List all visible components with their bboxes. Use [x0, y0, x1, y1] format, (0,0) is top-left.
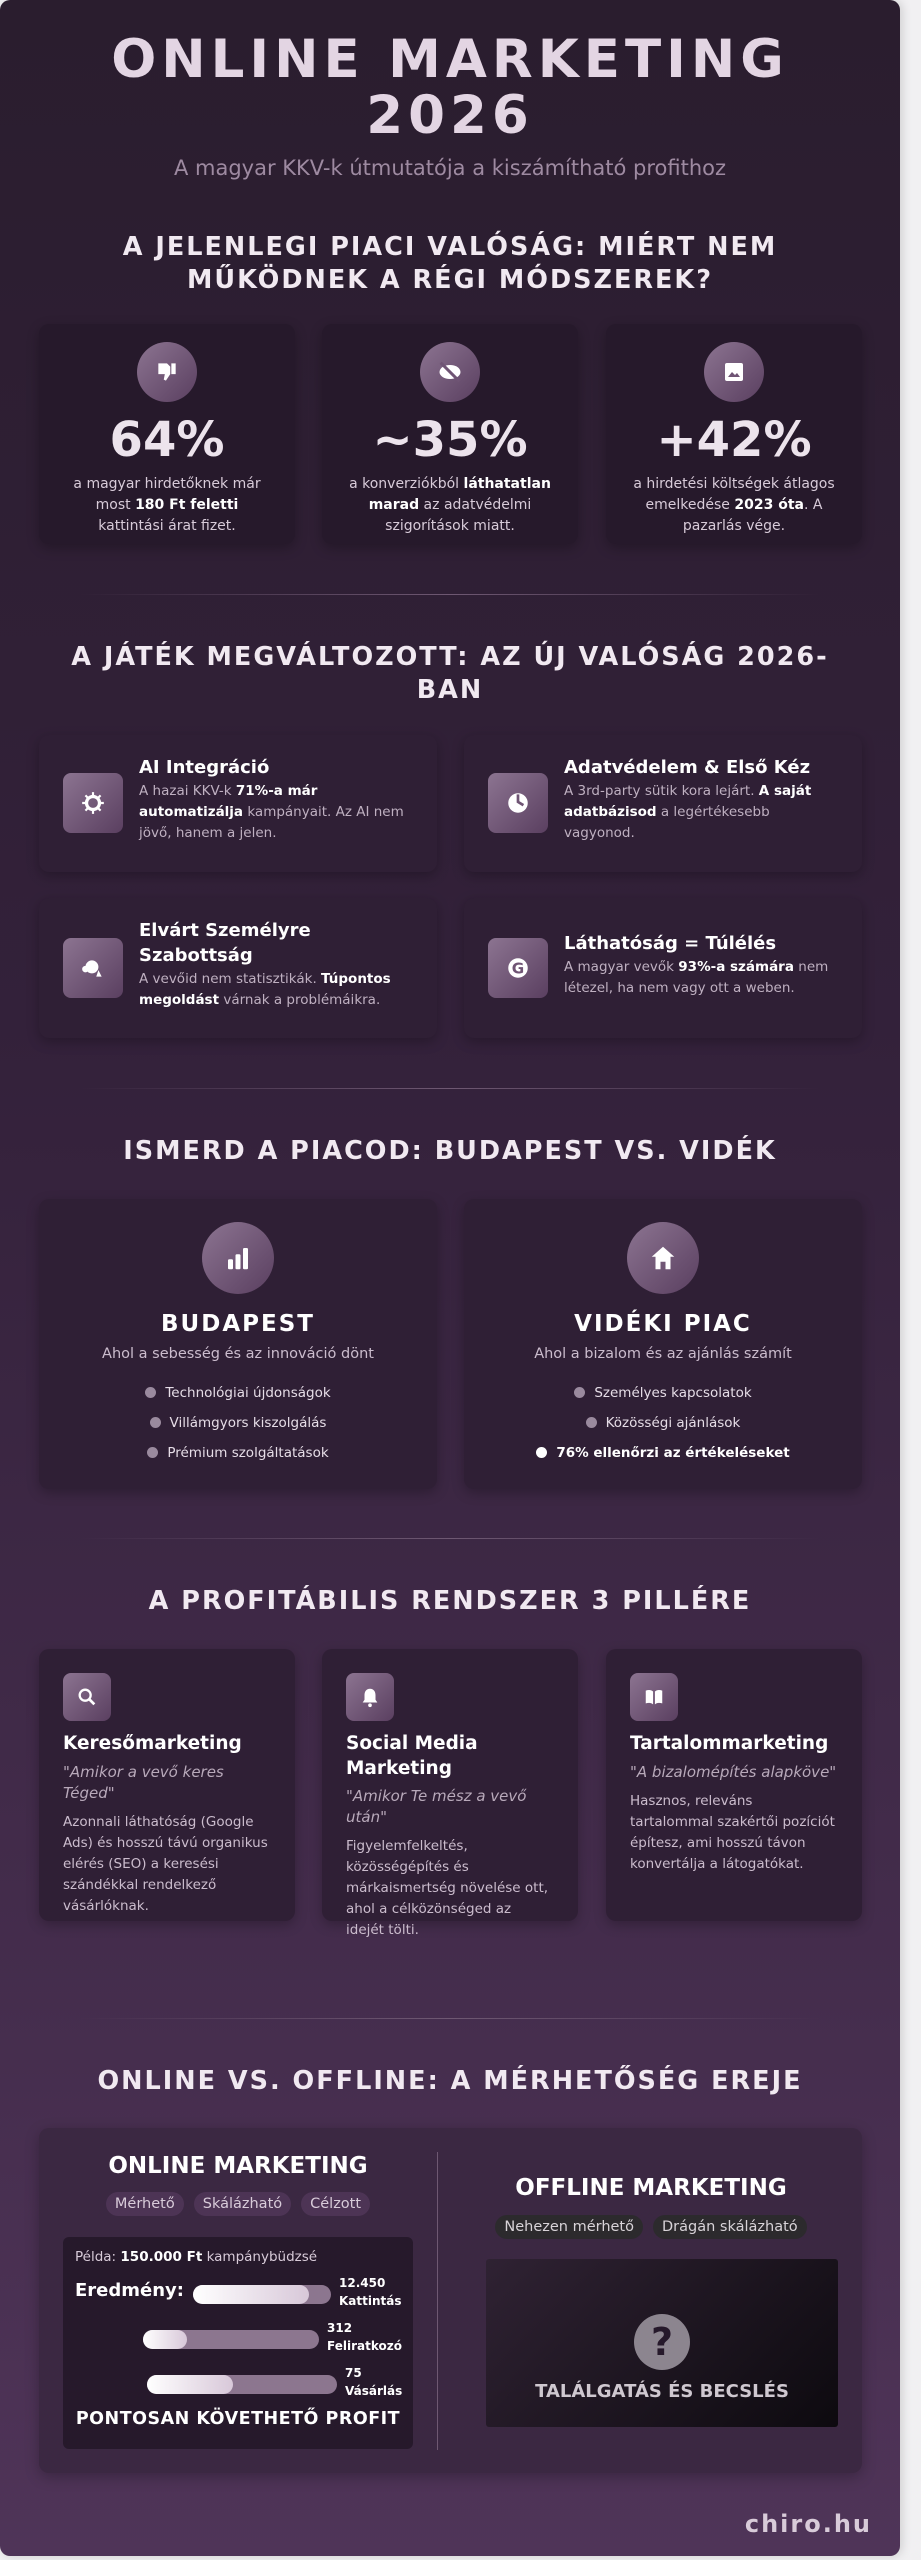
stat number: +42%: [656, 412, 812, 468]
heading: section 2: BAN: [417, 675, 483, 705]
bullet list: [145, 1385, 331, 1461]
heading: section 3: ISMERD A PIACOD: BUDAPEST VS. VIDÉK: [123, 1136, 777, 1166]
feature title: Szabottság: [139, 945, 253, 966]
stat text: a magyar hirdetőknek már most 180 Ft feletti kattintási árat fizet.: [73, 476, 261, 534]
icon: chip: [63, 773, 123, 833]
panel: Vidéki piac: Közösségi ajánlások: [606, 1415, 740, 1431]
panel: stat 35%: [322, 324, 578, 544]
panel: Budapest: Prémium szolgáltatások: [167, 1445, 329, 1461]
title: 2026: [366, 85, 534, 146]
icon: hidden eye: [420, 342, 480, 402]
heading: section 1: MŰKÖDNEK A RÉGI MÓDSZEREK?: [187, 265, 713, 295]
feature text: A 3rd-party sütik kora lejárt. A saját adatbázisod a legértékesebb vagyonod.: [564, 783, 811, 841]
label subscribers: Feliratkozó: [327, 2339, 402, 2353]
pillar text: Hasznos, releváns: [630, 1793, 752, 1809]
online column: [63, 2153, 413, 2449]
feature title: Adatvédelem & Első Kéz: [564, 757, 810, 778]
profit caption: PONTOSAN KÖVETHETŐ PROFIT: [76, 2409, 400, 2429]
footer brand: chiro.hu: [745, 2510, 872, 2538]
feature text: A vevőid nem statisztikák. Túpontos megoldást várnak a problémáikra.: [139, 971, 391, 1008]
heading: section 5: ONLINE VS. OFFLINE: A MÉRHETŐSÉG EREJE: [98, 2066, 802, 2096]
market title: BUDAPEST: [161, 1311, 315, 1337]
label clicks: [339, 2276, 402, 2308]
pillar title: Tartalommarketing: [630, 1733, 828, 1754]
guess caption: TALÁLGATÁS ÉS BECSLÉS: [535, 2381, 789, 2402]
panel: Budapest: [39, 1199, 437, 1489]
icon: question: [634, 2314, 690, 2370]
icon: question: ?: [651, 2320, 673, 2364]
label purchases: 75: [345, 2366, 362, 2380]
feature title: Láthatóság = Túlélés: [564, 933, 776, 954]
panel: Láthatóság: [464, 898, 862, 1038]
offline tags: Drágán skálázható: [662, 2219, 798, 2235]
market subtitle: Ahol a bizalom és az ajánlás számít: [534, 1346, 792, 1362]
title: ONLINE MARKETING: [111, 29, 789, 90]
label clicks: 12.450: [339, 2276, 385, 2290]
heading: section 2: A JÁTÉK MEGVÁLTOZOTT: AZ ÚJ VALÓSÁG 2026-: [71, 642, 829, 672]
pillar text: tartalommal szakértői pozíciót építesz, ami hosszú távon konvertálja a látogatókat.: [630, 1814, 835, 1872]
offline tags: Nehezen mérhető: [504, 2219, 634, 2235]
subtitle: A magyar KKV-k útmutatója a kiszámítható profithoz: [174, 156, 726, 180]
feature title: Elvárt Személyre: [139, 920, 311, 941]
label purchases: Vásárlás: [345, 2384, 402, 2398]
feature text: A magyar vevők 93%-a számára nem létezel, ha nem vagy ott a weben.: [564, 959, 828, 996]
icon: book: [630, 1673, 678, 1721]
panel: AI integráció: [39, 735, 437, 872]
online tags: Mérhető: [115, 2196, 175, 2212]
pillar title: Keresőmarketing: [63, 1733, 242, 1754]
label subscribers: [327, 2321, 402, 2353]
panel: Budapest: Villámgyors kiszolgálás: [170, 1415, 326, 1431]
pillar title: [346, 1733, 478, 1779]
panel: stat 42%: [606, 324, 862, 544]
icon: G: G: [512, 959, 524, 977]
icon: database: [488, 773, 548, 833]
guess box: [486, 2259, 838, 2427]
pillar title: Marketing: [346, 1758, 452, 1779]
heading: section 1: [122, 230, 777, 295]
panel: Vidéki piac: 76% ellenőrzi az értékeléseket: [556, 1445, 790, 1461]
icon: chart image: [704, 342, 764, 402]
online tags: Célzott: [310, 2196, 361, 2212]
bar: purchases: [147, 2375, 337, 2394]
pillar title: Social Media: [346, 1733, 478, 1754]
label clicks: Kattintás: [339, 2294, 402, 2308]
online tags: [106, 2192, 370, 2216]
panel: stat 64%: [39, 324, 295, 544]
panel: Social Media: [322, 1649, 578, 1921]
heading: section 1: A JELENLEGI PIACI VALÓSÁG: MIÉRT NEM: [123, 232, 777, 262]
title: [111, 29, 789, 146]
panel: Budapest: Technológiai újdonságok: [165, 1385, 331, 1401]
icon: G: [488, 938, 548, 998]
panel: Vidéki piac: [464, 1199, 862, 1489]
offline column: [486, 2175, 838, 2427]
bar: subscribers: [143, 2330, 319, 2349]
pillar quote: "Amikor Te mész a vevő után": [346, 1787, 526, 1826]
icon: bar chart: [202, 1222, 274, 1294]
pillar quote: "Amikor a vevő keres Téged": [63, 1763, 224, 1802]
online title: ONLINE MARKETING: [108, 2153, 368, 2179]
stat number: ~35%: [372, 412, 528, 468]
panel: Keresőmarketing: [39, 1649, 295, 1921]
feature title: [139, 920, 311, 966]
panel: Személyre szabottság: [39, 898, 437, 1038]
label purchases: [345, 2366, 402, 2398]
panel: Vidéki piac: Személyes kapcsolatok: [594, 1385, 752, 1401]
icon: search: [63, 1673, 111, 1721]
label eredmény: Eredmény:: [75, 2280, 184, 2301]
panel: comparison: [39, 2128, 862, 2473]
market subtitle: Ahol a sebesség és az innováció dönt: [102, 1346, 374, 1362]
icon: bell: [346, 1673, 394, 1721]
heading: section 4: A PROFITÁBILIS RENDSZER 3 PILLÉRE: [149, 1586, 751, 1616]
offline tags: [495, 2215, 807, 2239]
market title: VIDÉKI PIAC: [574, 1311, 752, 1337]
stat text: a hirdetési költségek átlagos emelkedése 2023 óta. A pazarlás vége.: [633, 476, 835, 534]
budget text: Példa: 150.000 Ft kampánybüdzsé: [75, 2249, 317, 2265]
results box: [63, 2237, 413, 2449]
offline title: OFFLINE MARKETING: [515, 2175, 787, 2201]
feature text: A hazai KKV-k 71%-a már automatizálja kampányait. Az AI nem jövő, hanem a jelen.: [139, 783, 404, 841]
panel: Tartalommarketing: [606, 1649, 862, 1921]
bar: clicks: [193, 2285, 331, 2304]
online tags: Skálázható: [203, 2196, 282, 2212]
pillar text: Azonnali láthatóság (Google Ads) és hosszú távú organikus elérés (SEO) a keresési szándékkal rendelkező vásárlóknak.: [63, 1814, 268, 1914]
pillar text: Figyelemfelkeltés, közösségépítés és márkaismertség növelése ott, ahol a célközönséged az idejét tölti.: [346, 1838, 548, 1938]
icon: thumbs down: [137, 342, 197, 402]
pillar quote: "A bizalomépítés alapköve": [630, 1763, 836, 1781]
label subscribers: 312: [327, 2321, 352, 2335]
bullet list: [536, 1385, 790, 1461]
icon: house: [627, 1222, 699, 1294]
stat number: 64%: [110, 412, 224, 468]
heading: section 2: [71, 640, 829, 705]
icon: users: [63, 938, 123, 998]
panel: Adatvédelem: [464, 735, 862, 872]
stat text: a konverziókból láthatatlan marad az adatvédelmi szigorítások miatt.: [349, 476, 551, 534]
feature title: AI Integráció: [139, 757, 269, 778]
